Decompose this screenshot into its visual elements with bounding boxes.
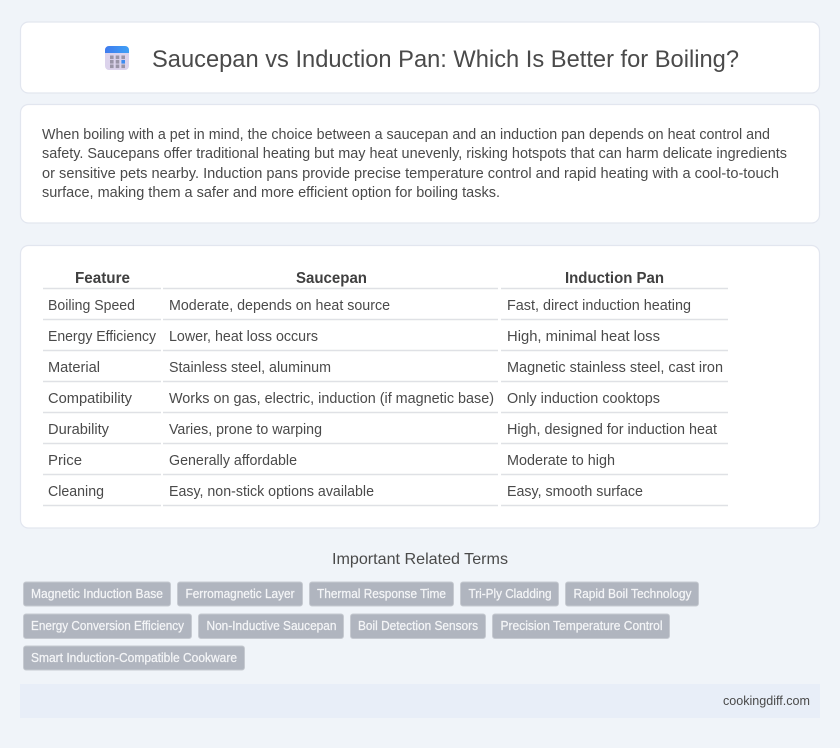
row: durability: Durability bbox=[48, 422, 110, 438]
row: durability: Varies, prone to warping bbox=[169, 422, 322, 438]
tag bbox=[310, 582, 454, 606]
tag: Thermal Response Time bbox=[317, 587, 446, 601]
row: compatibility: Compatibility bbox=[48, 391, 133, 407]
row: cleaning: Easy, non-stick options available bbox=[169, 484, 374, 500]
row: material: Magnetic stainless steel, cast iron bbox=[507, 360, 723, 376]
row: price: Generally affordable bbox=[169, 453, 297, 469]
tag: Energy Conversion Efficiency bbox=[31, 619, 185, 633]
text block: introduction: safety. Saucepans offer traditional heating but may heat unevenly, risking hotspots that can harm delicate ingredients bbox=[42, 146, 787, 162]
row: cleaning: Cleaning bbox=[48, 484, 104, 500]
tag bbox=[198, 614, 344, 638]
tag: Non-Inductive Saucepan bbox=[206, 619, 337, 633]
tag: Magnetic Induction Base bbox=[31, 587, 163, 601]
text block: introduction: When boiling with a pet in mind, the choice between a saucepan and an induction pan depends on heat control and bbox=[42, 127, 770, 143]
row: energy efficiency bbox=[48, 329, 660, 345]
tag bbox=[24, 646, 244, 670]
tags: related terms bbox=[24, 582, 698, 670]
row: boiling speed: Moderate, depends on heat source bbox=[169, 298, 390, 314]
tag bbox=[460, 582, 558, 606]
row: energy efficiency: Energy Efficiency bbox=[48, 329, 157, 345]
row: durability: High, designed for induction heat bbox=[507, 422, 717, 438]
panel: introduction bbox=[20, 104, 820, 223]
icon: calendar bbox=[105, 46, 129, 70]
tag bbox=[24, 582, 170, 606]
tag bbox=[492, 614, 670, 638]
title: Saucepan vs Induction Pan: Which Is Better for Boiling? bbox=[152, 46, 739, 73]
table header: Feature bbox=[75, 270, 130, 287]
tag: Rapid Boil Technology bbox=[574, 587, 692, 601]
text block: introduction bbox=[42, 127, 787, 201]
panel: comparison table bbox=[20, 246, 820, 528]
table header: Saucepan bbox=[296, 270, 367, 287]
panel: header bbox=[20, 22, 820, 93]
tag: Boil Detection Sensors bbox=[358, 619, 478, 633]
row: compatibility bbox=[48, 391, 660, 407]
row: material bbox=[48, 360, 723, 376]
row: price bbox=[48, 453, 615, 469]
tag: Precision Temperature Control bbox=[500, 619, 662, 633]
row: cleaning: Easy, smooth surface bbox=[507, 484, 643, 500]
row: boiling speed bbox=[48, 298, 691, 314]
tag bbox=[24, 614, 192, 638]
tag bbox=[566, 582, 698, 606]
tag: Ferromagnetic Layer bbox=[186, 587, 294, 601]
row: energy efficiency: Lower, heat loss occurs bbox=[169, 329, 318, 345]
tag bbox=[350, 614, 486, 638]
row: boiling speed: Fast, direct induction heating bbox=[507, 298, 691, 314]
text block: introduction: or sensitive pets nearby. Induction pans provide precise temperature control and rapid heating with a cool-to-touch bbox=[42, 166, 779, 182]
row: price: Price bbox=[48, 453, 82, 469]
row: compatibility: Only induction cooktops bbox=[507, 391, 660, 407]
row: material: Material bbox=[48, 360, 100, 376]
footer: cookingdiff.com bbox=[723, 693, 810, 708]
row: compatibility: Works on gas, electric, induction (if magnetic base) bbox=[169, 391, 494, 407]
tag bbox=[178, 582, 302, 606]
footer bbox=[20, 684, 820, 718]
row: boiling speed: Boiling Speed bbox=[48, 298, 135, 314]
row: material: Stainless steel, aluminum bbox=[169, 360, 331, 376]
row: price: Moderate to high bbox=[507, 453, 615, 469]
row: energy efficiency: High, minimal heat loss bbox=[507, 329, 660, 345]
row: durability bbox=[48, 422, 717, 438]
text block: introduction: surface, making them a safer and more efficient option for boiling tasks. bbox=[42, 185, 500, 201]
tag: Tri-Ply Cladding bbox=[468, 587, 552, 601]
table header bbox=[75, 270, 664, 287]
table header: Induction Pan bbox=[565, 270, 664, 287]
tag: Smart Induction-Compatible Cookware bbox=[31, 651, 237, 665]
heading: related terms: Important Related Terms bbox=[332, 551, 508, 568]
row: cleaning bbox=[48, 484, 643, 500]
